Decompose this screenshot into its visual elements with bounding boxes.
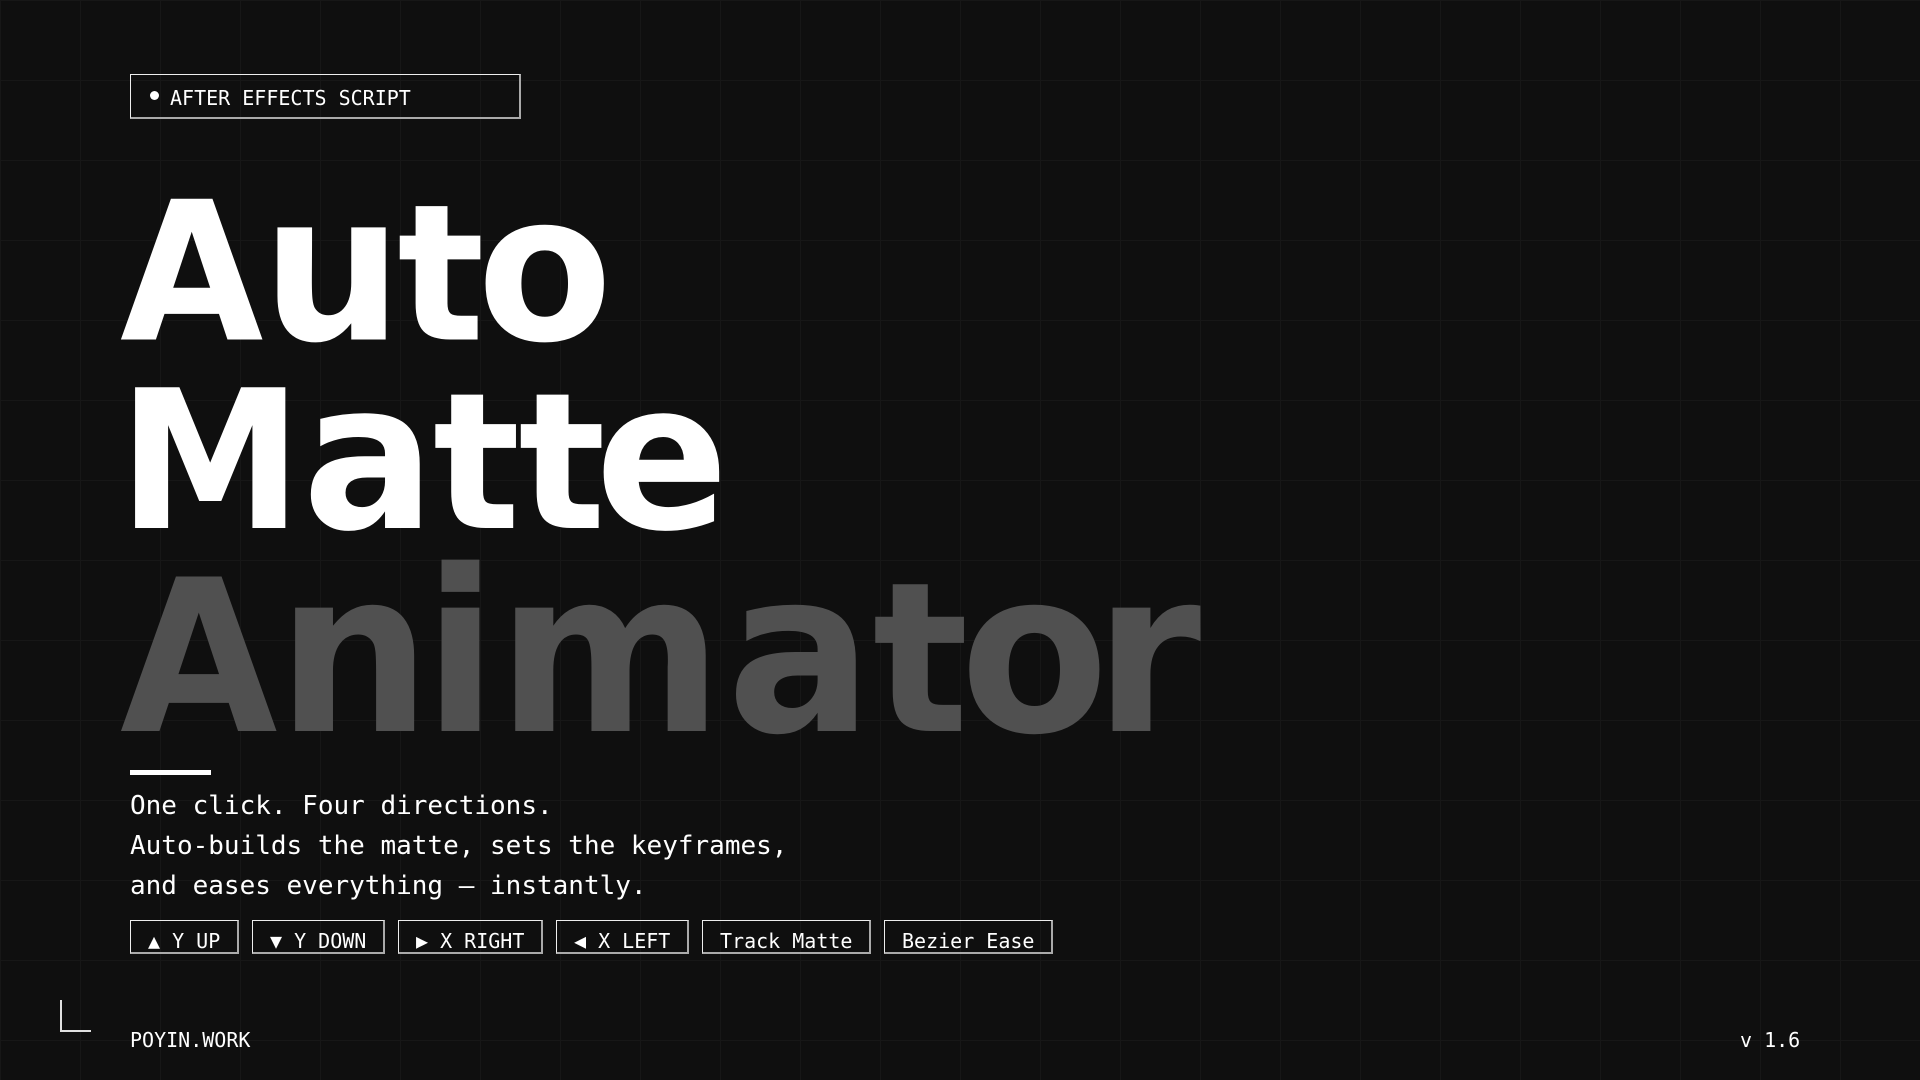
footer brand: POYIN.WORK: [130, 1028, 250, 1052]
title line: Animator: or: [960, 523, 1201, 785]
version: v 1.6: [1740, 1028, 1800, 1052]
tag: track matte: [702, 920, 871, 954]
title line: Animator: A: [120, 535, 278, 782]
tag: X left: [556, 920, 689, 954]
description: One click. Four directions. Auto-builds the matte, sets the keyframes, and eases everything — instantly.: [130, 791, 787, 901]
tag: bezier ease: Bezier Ease: [902, 929, 1034, 953]
title line: Auto: t: [397, 163, 485, 384]
title line: Animator: t: [873, 538, 969, 781]
title line: Matte: e: [595, 338, 729, 577]
title line: Matte: tt: [433, 352, 606, 573]
tag: X left: ◀ X LEFT: [574, 929, 670, 953]
tag: Y up: [130, 920, 239, 954]
title line: Animator: nima: [277, 523, 873, 785]
tag: X right: [398, 920, 543, 954]
badge dot: [150, 91, 159, 100]
badge: [130, 74, 521, 119]
title line: Auto: [120, 150, 612, 388]
badge label: AFTER EFFECTS SCRIPT: [170, 86, 411, 110]
tag: Y up: ▲ Y UP: [148, 929, 220, 953]
title line: Animator: [120, 523, 1201, 785]
title line: Auto: o: [477, 150, 612, 388]
corner mark: [60, 1000, 91, 1032]
tag: X right: ▶ X RIGHT: [416, 929, 524, 953]
tag: Y down: [252, 920, 385, 954]
accent rule: [130, 770, 211, 775]
title line: Matte: M: [118, 348, 302, 574]
title line: Matte: [118, 338, 729, 577]
title line: Auto: A: [120, 160, 263, 385]
tag: Y down: ▼ Y DOWN: [270, 929, 366, 953]
title line: Matte: a: [302, 338, 435, 577]
title line: Auto: u: [262, 150, 402, 388]
tag: track matte: Track Matte: [720, 929, 852, 953]
tag: bezier ease: [884, 920, 1053, 954]
